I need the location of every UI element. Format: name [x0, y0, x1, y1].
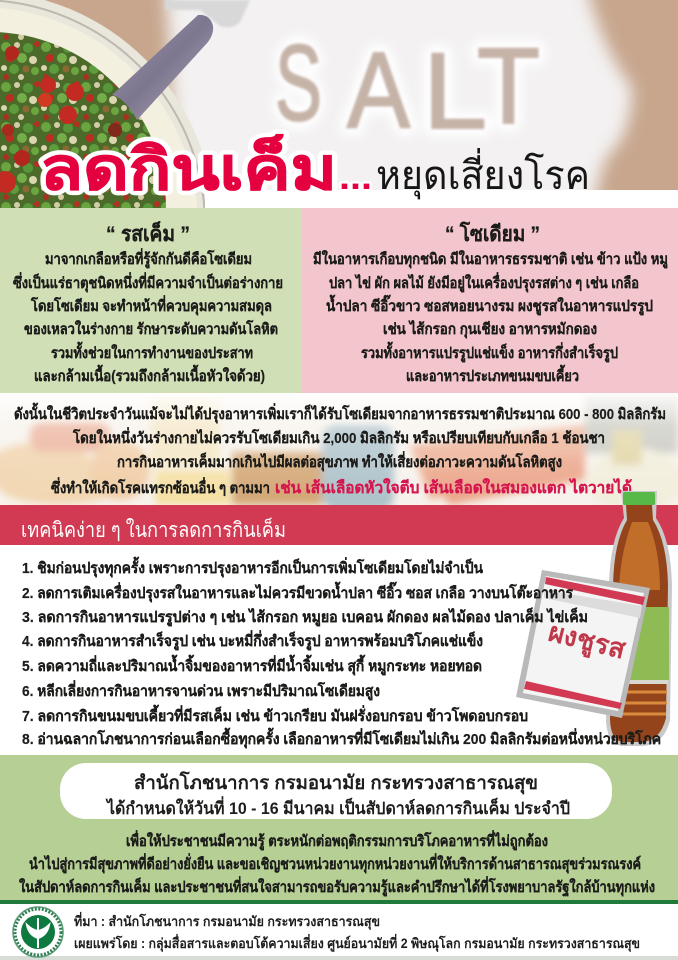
salt pile [156, 0, 642, 190]
panel: salty taste [0, 208, 302, 393]
list: eight tips [22, 556, 661, 749]
word SALT in the salt: T [477, 25, 540, 146]
word SALT in the salt [275, 38, 544, 135]
panel: sodium [302, 208, 678, 393]
text: source and publisher: เผยแพร่โดย : กลุ่มสื่อสารและตอบโต้ความเสี่ยง ศูนย์อนามัยที่ 2 พิษณุโลก กรมอนามัย กระทรวงสาธารณสุข [74, 933, 640, 952]
list: eight tips: 4. ลดการกินอาหารสำเร็จรูป เช่น บะหมี่กึ่งสำเร็จรูป อาหารพร้อมบริโภคแช่แข็ง [22, 630, 483, 651]
heading: sodium: “ โซเดียม ” [445, 221, 540, 246]
title [40, 134, 590, 202]
text: daily sodium summary: การกินอาหารเค็มมากเกินไปมีผลต่อสุขภาพ ทำให้เสี่ยงต่อภาวะความดันโลหิตสูง [117, 451, 562, 472]
salt shaker [165, 0, 250, 27]
icon: ministry of public health seal [13, 907, 63, 957]
list: eight tips: 2. ลดการเติมเครื่องปรุงรสในอาหารและไม่ควรมีขวดน้ำปลา ซีอิ๊ว ซอส เกลือ วางบนโต๊ะอาหาร [22, 581, 574, 603]
list: eight tips: 7. ลดการกินขนมขบเคี้ยวที่มีรสเค็ม เช่น ข้าวเกรียบ มันฝรั่งอบกรอบ ข้าวโพดอบกรอบ [22, 704, 528, 725]
word SALT in the salt: L [423, 30, 487, 151]
banner: easy techniques: เทคนิคง่าย ๆ ในการลดการกินเค็ม [21, 516, 286, 542]
callout: salt reduction week [60, 763, 612, 819]
text: salty taste description: ของเหลวในร่างกาย รักษาระดับความดันโลหิต [24, 319, 278, 338]
spoon [112, 15, 213, 120]
list: eight tips: 6. หลีกเลี่ยงการกินอาหารจานด่วน เพราะมีปริมาณโซเดียมสูง [22, 680, 380, 701]
illustration: MSG sachet: ผงชูรส [545, 617, 629, 667]
food photo background [0, 393, 678, 512]
text: daily sodium summary: เช่น เส้นเลือดหัวใจตีบ เส้นเลือดในสมองแตก ไตวายได้ [275, 478, 632, 497]
text: sodium description: รวมทั้งอาหารแปรรูปแช่แข็ง อาหารกึ่งสำเร็จรูป [361, 341, 618, 363]
title: ... [339, 156, 372, 197]
callout: salt reduction week: ได้กำหนดให้วันที่ 10 - 16 มีนาคม เป็นสัปดาห์ลดการกินเค็ม ประจำปี [105, 796, 570, 818]
text: source and publisher [74, 911, 640, 952]
white strip under title [205, 190, 678, 208]
list: eight tips: 1. ชิมก่อนปรุงทุกครั้ง เพราะการปรุงอาหารอีกเป็นการเพิ่มโซเดียมโดยไม่จำเป็น [22, 556, 484, 578]
text: salty taste description: ซึ่งเป็นแร่ธาตุชนิดหนึ่งที่มีความจำเป็นต่อร่างกาย [13, 272, 283, 293]
text: daily sodium summary: ซึ่งทำให้เกิดโรคแทรกซ้อนอื่น ๆ ตามมา [51, 477, 270, 497]
text: sodium description: เช่น ไส้กรอก กุนเชียง อาหารหมักดอง [383, 319, 597, 339]
hero photo: salt and chili sauce [0, 0, 678, 208]
list: eight tips: 3. ลดการกินอาหารแปรรูปต่าง ๆ เช่น ไส้กรอก หมูยอ เบคอน ผักดอง ผลไม้ดอง ปลาเค็ม ไข่เค็ม [22, 607, 588, 627]
title: หยุดเสี่ยงโรค [376, 148, 590, 200]
text: salty taste description [13, 248, 283, 385]
word SALT in the salt: L [423, 30, 487, 151]
text: sodium description [313, 250, 668, 385]
word SALT in the salt: A [347, 29, 410, 150]
banner: easy techniques [0, 505, 678, 545]
text: daily sodium summary: โดยในหนึ่งวันร่างกายไม่ควรรับโซเดียมเกิน 2,000 มิลลิกรัม หรือเปรียบเทียบกับเกลือ 1 ช้อนชา [72, 427, 605, 447]
title: ลดกินเค็ม [40, 134, 337, 202]
text: invitation: เพื่อให้ประชาชนมีความรู้ ตระหนักต่อพฤติกรรมการบริโภคอาหารที่ไม่ถูกต้อง [126, 830, 548, 851]
text: source and publisher: ที่มา : สำนักโภชนาการ กรมอนามัย กระทรวงสาธารณสุข [74, 911, 380, 930]
bowl [0, 0, 205, 208]
text: sodium description: น้ำปลา ซีอิ๊วขาว ซอสหอยนางรม ผงชูรสในอาหารแปรรูป [326, 294, 653, 316]
list: eight tips: 5. ลดความถี่และปริมาณน้ำจิ้มของอาหารที่มีน้ำจิ้มเช่น สุกี้ หมูกระทะ หอยทอด [22, 654, 482, 676]
text: salty taste description: และกล้ามเนื้อ(รวมถึงกล้ามเนื้อหัวใจด้วย) [34, 364, 265, 385]
text: salty taste description: มาจากเกลือหรือที่รู้จักกันดีคือโซเดียม [45, 248, 252, 269]
text: invitation [19, 830, 655, 897]
text: daily sodium summary [14, 402, 666, 497]
word SALT in the salt: T [477, 25, 540, 146]
word SALT in the salt: A [347, 29, 410, 150]
panel: campaign announcement [0, 755, 678, 900]
title: ... [339, 156, 372, 197]
text: salty taste description: โดยโซเดียม จะทำหน้าที่ควบคุมความสมดุล [30, 295, 272, 316]
text: sodium description: และอาหารประเภทขนมขบเคี้ยว [406, 364, 579, 385]
title: ลดกินเค็ม [40, 134, 337, 202]
word SALT in the salt: S [275, 22, 322, 143]
heading: salty taste: “ รสเค็ม ” [106, 220, 190, 246]
illustration: MSG sachet [516, 570, 650, 718]
illustration: fish sauce bottle [606, 491, 672, 746]
word SALT in the salt: S [275, 22, 322, 143]
footer [0, 904, 678, 960]
text: salty taste description: รวมทั้งช่วยในการทำงานของประสาท [51, 341, 253, 362]
callout: salt reduction week: สำนักโภชนาการ กรมอนามัย กระทรวงสาธารณสุข [134, 771, 538, 795]
bottle liquid shading [612, 692, 667, 714]
